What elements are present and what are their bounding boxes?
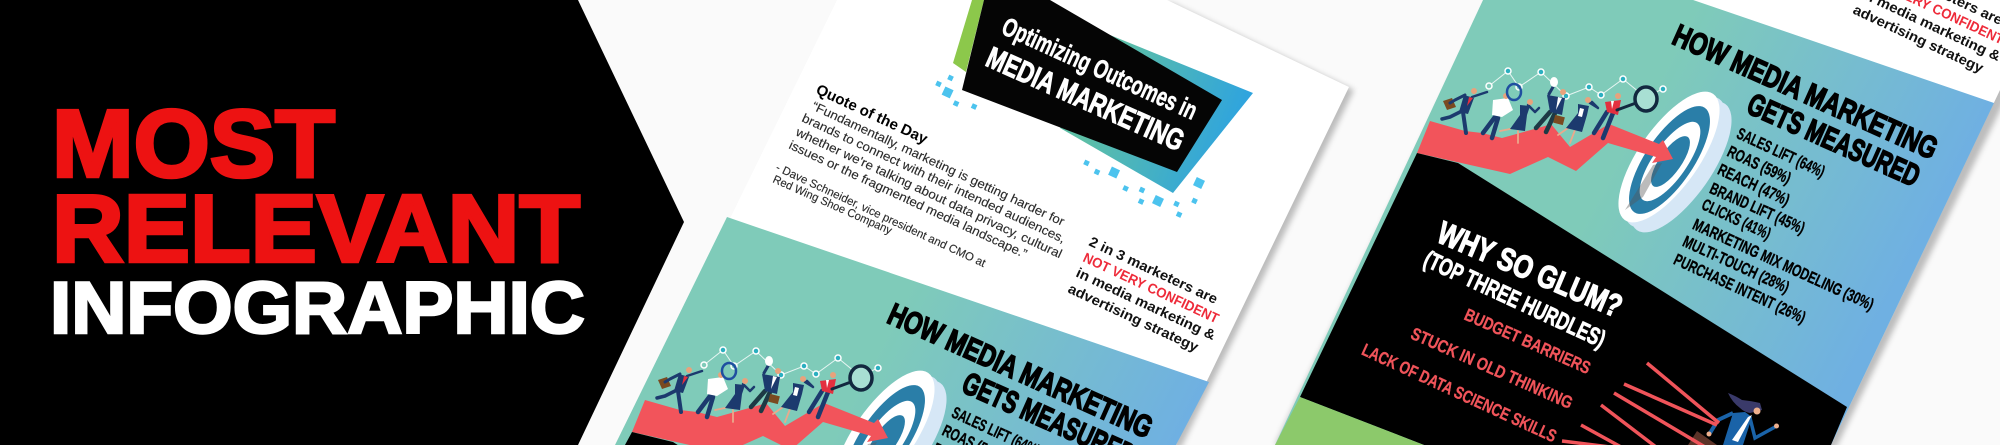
- black section page 1: [619, 432, 695, 445]
- stat text on page 2: advertising strategy: [1851, 1, 1986, 76]
- measurement list: ROAS (59%): [1724, 143, 1794, 188]
- quote of the day: - Dave Schneider, vice president and CMO at: [774, 162, 988, 270]
- lower sheet content page 1: [615, 217, 1209, 445]
- stat: 2 in 3 marketers: advertising strategy: [1066, 280, 1201, 355]
- quote of the day: brands to connect with their intended audiences,: [800, 111, 1068, 246]
- quote of the day: “Fundamentally, marketing is getting harder for: [810, 99, 1067, 229]
- black section: why so glum: [1300, 153, 1847, 445]
- quote of the day: Red Wing Shoe Company: [771, 174, 894, 237]
- network line chart: [1486, 68, 1666, 99]
- heading: why so glum: (TOP THREE HURDLES): [1419, 246, 1610, 353]
- quote of the day: [771, 81, 1068, 270]
- hurdles list: STUCK IN OLD THINKING: [1408, 323, 1576, 413]
- hurdles list: BUDGET BARRIERS: [1461, 304, 1594, 378]
- quote of the day: whether we're talking about data privacy, cultural: [793, 125, 1064, 261]
- headline: most relevant infographic: INFOGRAPHIC: [50, 268, 585, 349]
- network line page 1: [701, 347, 881, 378]
- stat: 2 in 3 marketers: in media marketing &: [1074, 264, 1218, 343]
- measurement list: MULTI-TOUCH (28%): [1680, 233, 1792, 297]
- page 1: left infographic sheet: [615, 0, 1354, 445]
- stat: 2 in 3 marketers: [1066, 233, 1222, 355]
- headline: most relevant infographic: MOST: [52, 90, 335, 198]
- green footer section: [1275, 397, 1424, 445]
- target page 1: [815, 356, 965, 445]
- title banner: MEDIA MARKETING: [981, 41, 1189, 158]
- speed streaks: [1562, 363, 1719, 445]
- stat: 2 in 3 marketers: 2 in 3 marketers are: [1087, 233, 1221, 307]
- title banner: [953, 0, 1253, 193]
- measurement list page 1: [930, 404, 1043, 445]
- running businesswoman: [1688, 393, 1779, 445]
- business people page 1: [657, 356, 872, 422]
- black chevron panel: [0, 0, 684, 445]
- measurement list: CLICKS (41%): [1699, 196, 1773, 243]
- title banner: Optimizing Outcomes in: [998, 11, 1202, 126]
- stat: 2 in 3 marketers: NOT VERY CONFIDENT: [1081, 249, 1222, 326]
- measurement list: SALES LIFT (64%): [1734, 125, 1828, 181]
- heading: why so glum: WHY SO GLUM?: [1432, 214, 1628, 324]
- measurement list: BRAND LIFT (45%): [1707, 180, 1807, 238]
- headline: most relevant infographic: RELEVANT: [52, 176, 580, 282]
- measurement list: MARKETING MIX MODELING (30%): [1690, 216, 1876, 314]
- teal section page 1: [615, 217, 1209, 445]
- business people on arrow: [1442, 77, 1657, 143]
- red zigzag arrow: [1417, 121, 1673, 174]
- quote of the day: issues or the fragmented media landscape.”: [787, 138, 1029, 261]
- target illustration: [1600, 77, 1750, 247]
- decorative blue squares: [935, 75, 1205, 218]
- measurement list: REACH (47%): [1715, 161, 1792, 210]
- measurement list: PURCHASE INTENT (26%): [1671, 251, 1808, 327]
- page 2: right infographic sheet: [1275, 0, 2000, 445]
- heading: how media marketing gets measured: GETS MEASURED: [1742, 86, 1925, 194]
- teal section page 2: [1275, 0, 1994, 445]
- headline: most relevant infographic: [50, 90, 585, 349]
- measurement list: [1671, 125, 1876, 327]
- quote of the day: Quote of the Day: [813, 81, 931, 148]
- hurdles list: [1359, 304, 1594, 445]
- red arrow page 1: [632, 400, 888, 445]
